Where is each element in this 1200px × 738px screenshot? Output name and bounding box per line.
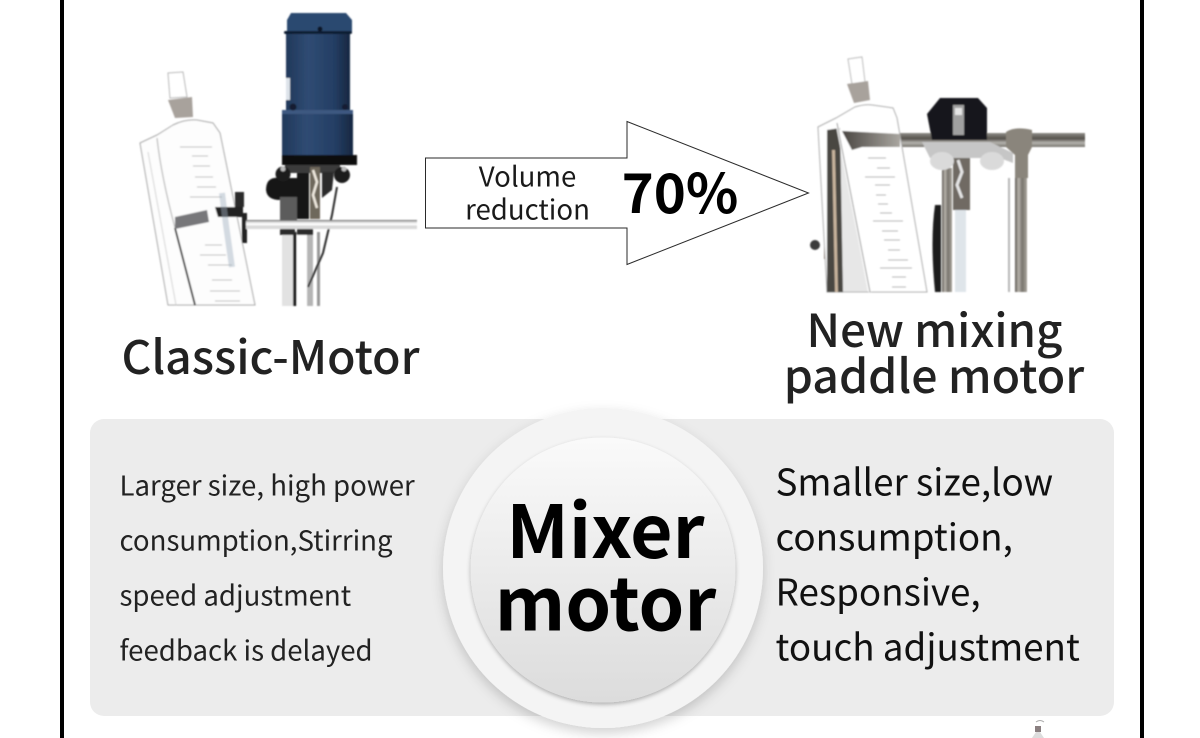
text block: classic motor drawbacks: feedback is delayed: [120, 628, 373, 668]
text block: new motor advantages: Smaller size,low: [776, 452, 1053, 506]
arrow label: volume reduction: Volume: [479, 154, 576, 194]
motor mount: [922, 142, 1013, 170]
arrow value: 70%: 70%: [622, 150, 738, 229]
panel: comparison: [90, 419, 1114, 716]
motor coupling and knobs: [266, 165, 350, 235]
icon: flask top fragment: [1032, 720, 1044, 738]
heading: new mixing paddle motor: New mixing: [807, 295, 1062, 361]
badge title: motor: [495, 546, 716, 652]
small motor: [927, 98, 987, 140]
heading: new mixing paddle motor: paddle motor: [784, 340, 1085, 407]
text block: classic motor drawbacks: consumption,Stirring: [120, 518, 393, 558]
badge title: [495, 474, 716, 652]
support rods: [282, 187, 337, 306]
text block: new motor advantages: consumption,: [776, 508, 1013, 562]
text block: classic motor drawbacks: speed adjustment: [120, 574, 351, 614]
heading: classic motor: Classic-Motor: [121, 321, 421, 388]
glass flask: [818, 57, 927, 292]
clamp: [1006, 128, 1032, 178]
text block: new motor advantages: touch adjustment: [776, 618, 1080, 672]
arrow: volume reduction 70%: [426, 122, 808, 264]
image: new mixing paddle motor with flask: [810, 57, 1085, 292]
text block: classic motor drawbacks: Larger size, high power: [120, 464, 415, 504]
text block: new motor advantages: Responsive,: [776, 562, 981, 616]
horizontal bar: [900, 133, 1085, 147]
page frame: right border: [1140, 0, 1144, 738]
badge: mixer motor: [443, 408, 763, 728]
text block: classic motor drawbacks: [120, 464, 415, 668]
stand rods: [810, 150, 1027, 292]
motor body: [282, 13, 357, 165]
badge title: Mixer: [506, 474, 705, 580]
image: classic motor with glass flask: [140, 13, 417, 306]
text block: new motor advantages: [776, 452, 1080, 672]
arrow label: volume reduction: reduction: [465, 188, 590, 228]
glass flask: [140, 72, 255, 305]
page frame: left border: [60, 0, 64, 738]
horizontal bar: [246, 220, 417, 229]
heading: new mixing paddle motor: [784, 295, 1085, 407]
arrow label: volume reduction: [465, 154, 590, 228]
